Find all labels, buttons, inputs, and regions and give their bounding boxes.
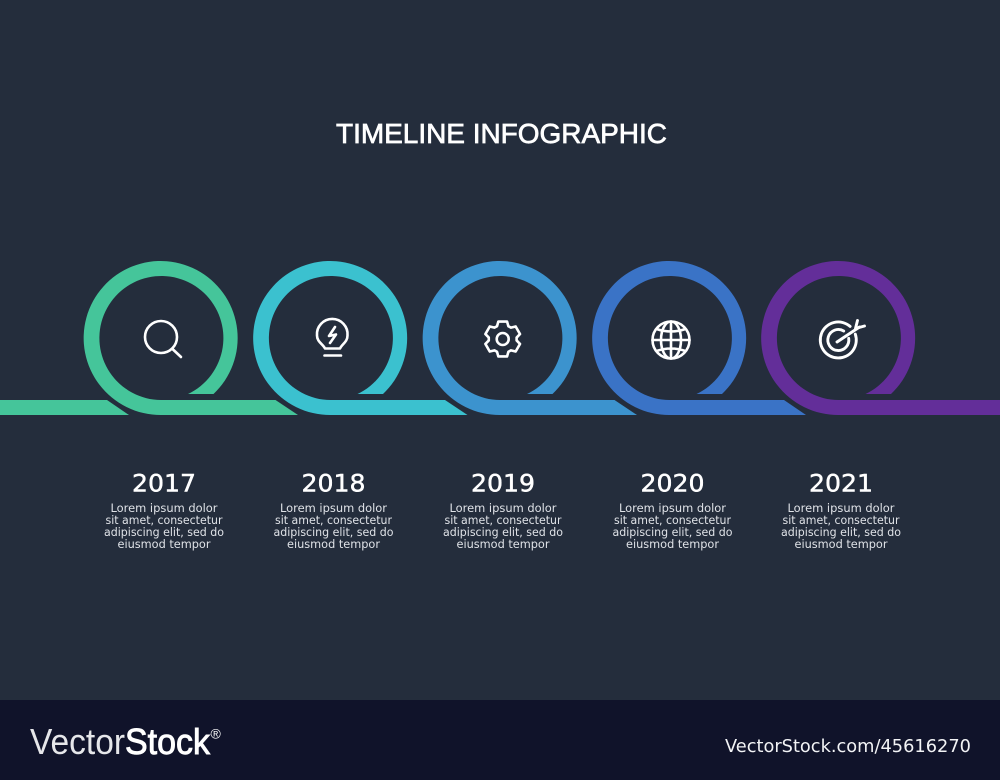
ribbon lead-in [0, 400, 129, 415]
VectorStock logo: Vector [30, 721, 125, 762]
description: adipiscing elit, sed do [104, 526, 224, 539]
year block: 2021 [781, 470, 901, 551]
description: Lorem ipsum dolor [450, 502, 557, 515]
year: 2018 [302, 470, 366, 498]
description: eiusmod tempor [287, 538, 380, 551]
footer bar [0, 700, 1000, 780]
description: eiusmod tempor [794, 538, 888, 551]
icon: gear [485, 322, 520, 356]
timeline ribbon [0, 261, 1000, 415]
description: adipiscing elit, sed do [274, 526, 394, 539]
description [104, 502, 224, 551]
icon: globe [652, 322, 690, 358]
description: sit amet, consectetur [614, 514, 731, 527]
year block: 2019 [443, 470, 563, 551]
description [612, 502, 733, 551]
description [274, 502, 394, 551]
description: sit amet, consectetur [106, 514, 223, 527]
loop: 2020 [592, 261, 806, 415]
image id: VectorStock.com/45616270 [725, 737, 971, 757]
description [443, 502, 563, 551]
description: Lorem ipsum dolor [110, 502, 218, 515]
year: 2021 [809, 470, 873, 498]
title: TIMELINE INFOGRAPHIC [336, 118, 667, 149]
description: Lorem ipsum dolor [619, 502, 726, 515]
year: 2019 [471, 470, 535, 498]
description: eiusmod tempor [456, 538, 550, 551]
description: adipiscing elit, sed do [781, 526, 901, 539]
description: sit amet, consectetur [782, 514, 900, 527]
icon: magnifier [145, 321, 181, 357]
year: 2020 [640, 470, 704, 498]
loop: 2018 [253, 261, 468, 415]
description: adipiscing elit, sed do [443, 526, 563, 539]
year block: 2020 [612, 470, 733, 551]
loop: 2021 [761, 261, 1000, 415]
icon: target [820, 320, 864, 358]
description: eiusmod tempor [118, 538, 211, 551]
description: sit amet, consectetur [275, 514, 392, 527]
year block: 2018 [274, 470, 394, 551]
loop: 2019 [423, 261, 637, 415]
VectorStock logo [30, 721, 222, 762]
loop: 2017 [84, 261, 298, 415]
description [781, 502, 901, 551]
description: Lorem ipsum dolor [280, 502, 387, 515]
VectorStock logo: Stock [125, 721, 211, 762]
year block: 2017 [104, 470, 224, 551]
description: Lorem ipsum dolor [788, 502, 895, 515]
description: adipiscing elit, sed do [612, 526, 733, 539]
description: sit amet, consectetur [444, 514, 562, 527]
description: eiusmod tempor [626, 538, 719, 551]
icon: light bulb [317, 319, 348, 356]
year: 2017 [132, 470, 196, 498]
VectorStock logo: ® [210, 726, 222, 742]
